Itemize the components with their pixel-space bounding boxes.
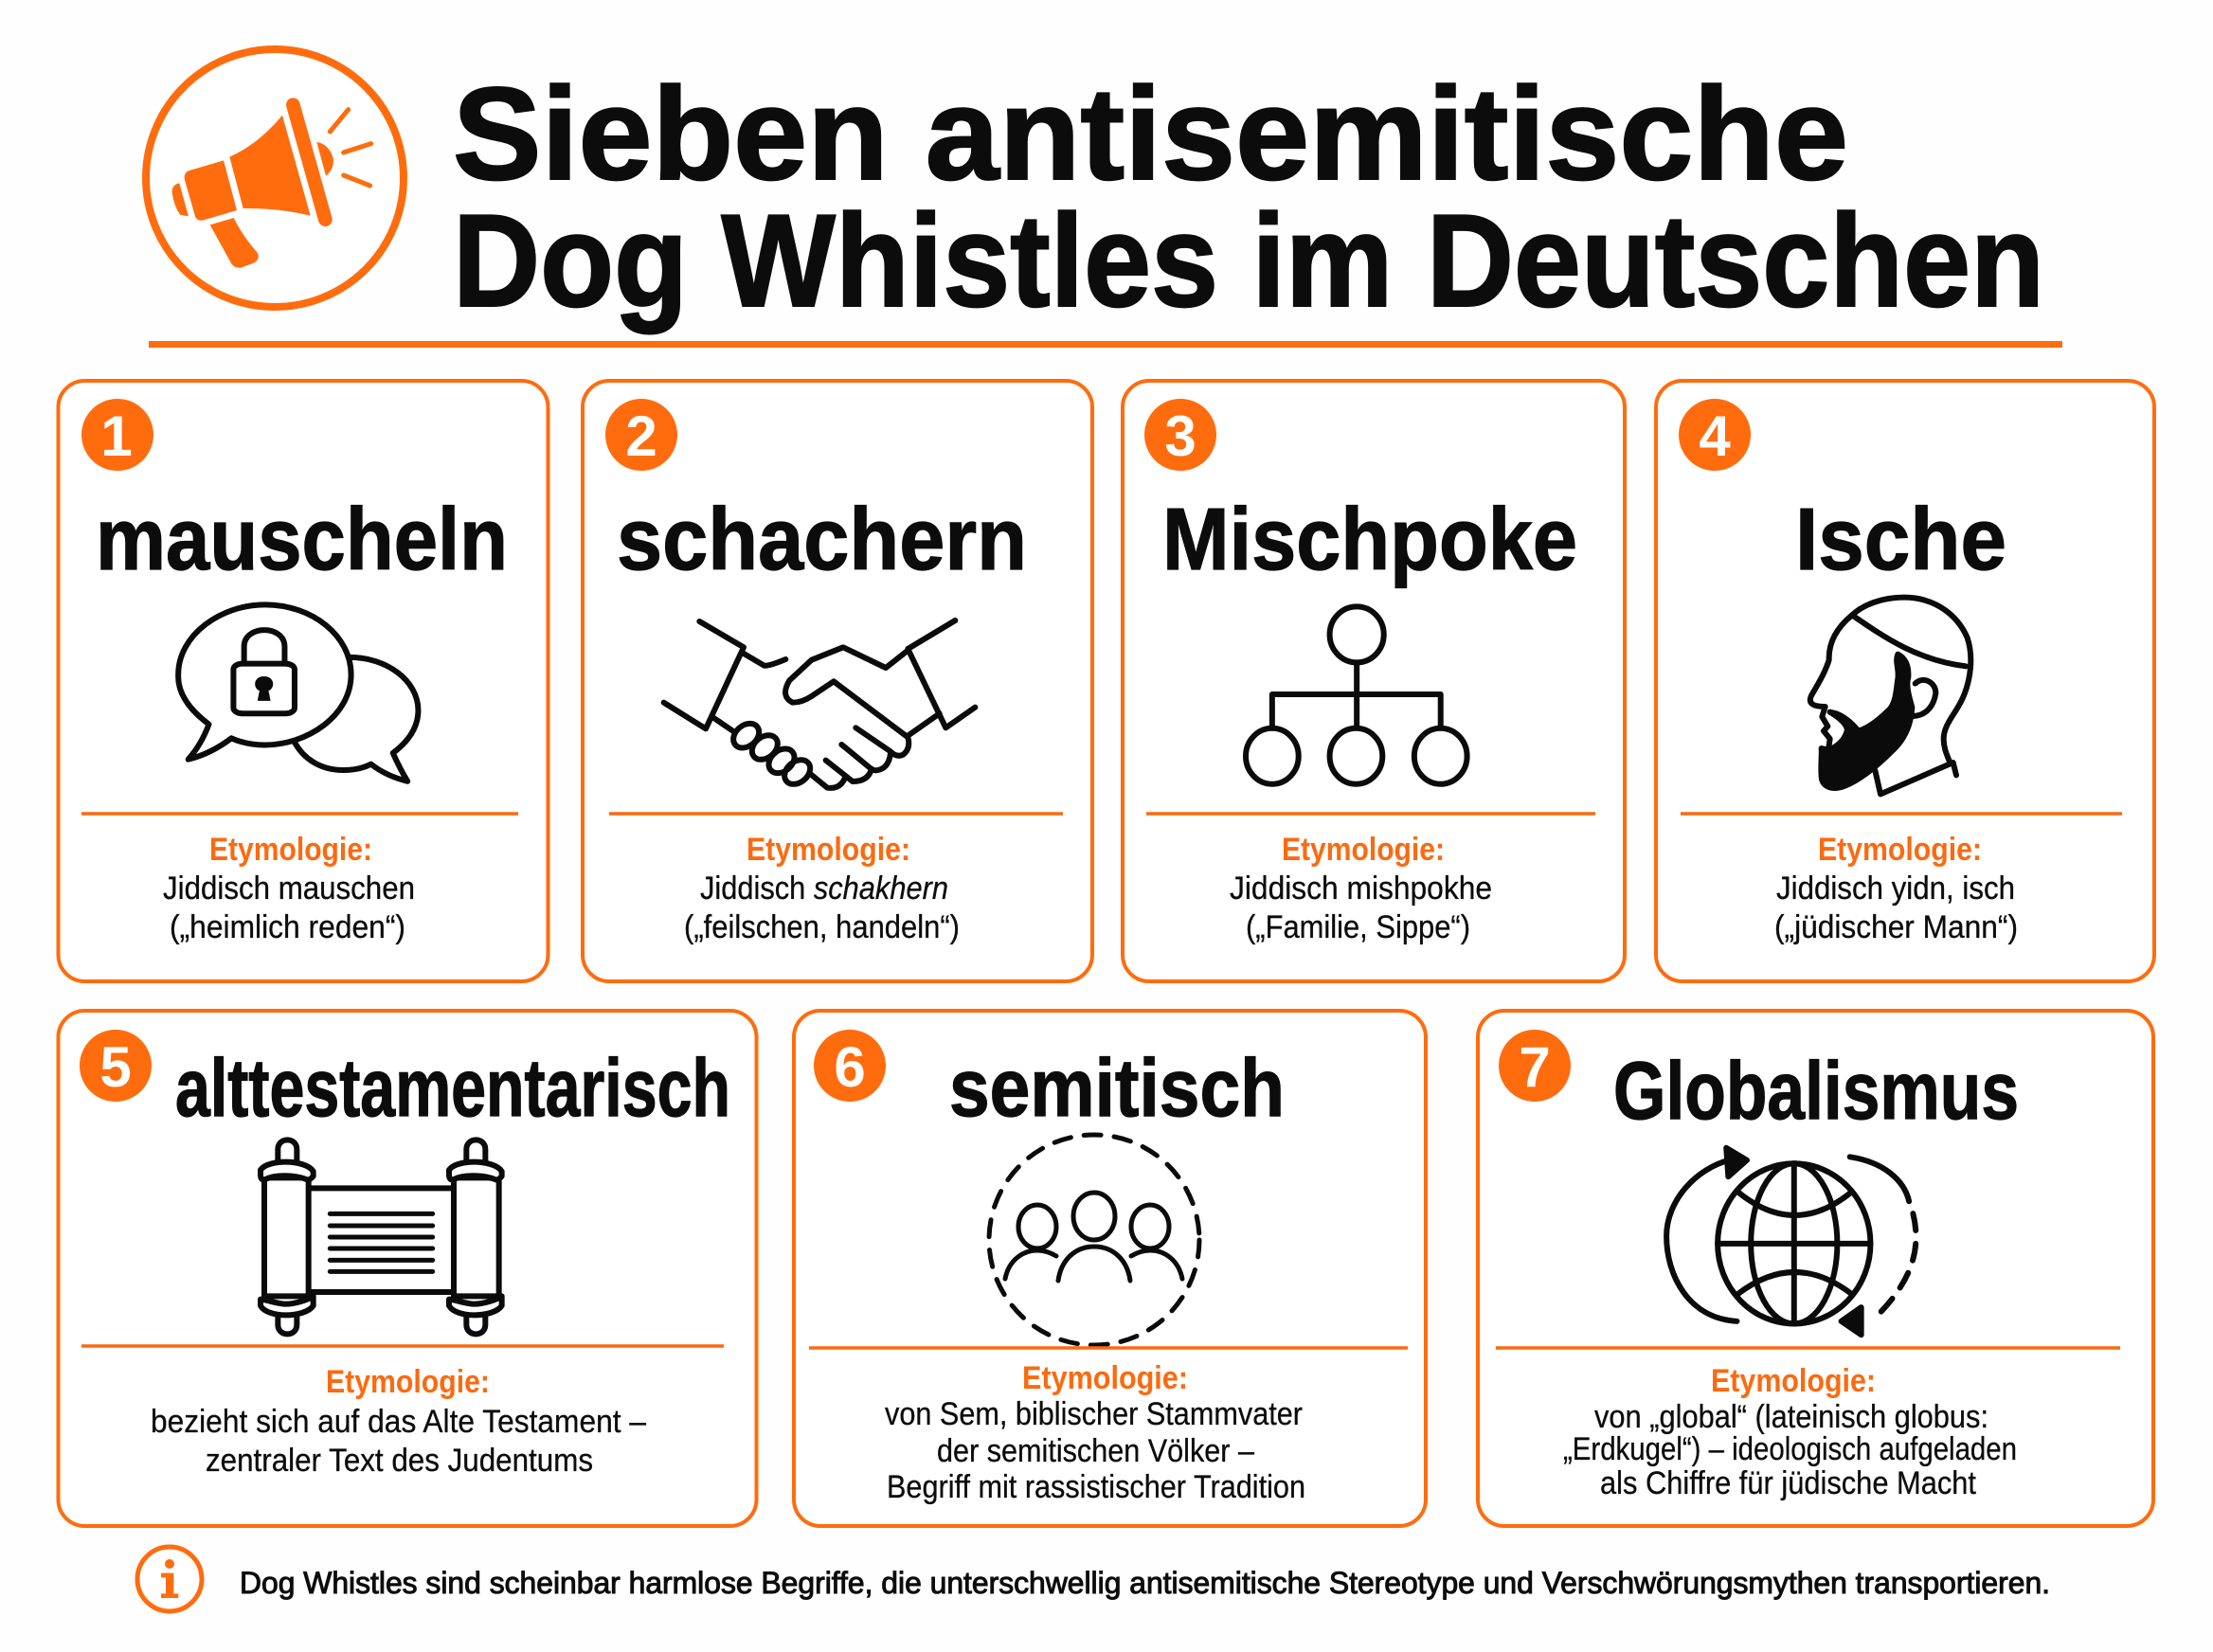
etymology text: Etymologie: [747,832,910,868]
badge 7: 7 [1519,1035,1551,1099]
badge 1: 1 [100,404,133,468]
icon: speech bubbles with lock [178,604,418,781]
icon: family tree [1246,606,1467,784]
badge 2: 2 [625,404,657,468]
term: Mischpoke: Mischpoke [1162,490,1577,588]
panel: Mischpoke [1123,381,1625,981]
term: Globalismus: Globalismus [1613,1046,2019,1137]
badge 6 [814,1030,886,1102]
footer note: Dog Whistles sind scheinbar harmlose Begriffe, die unterschwellig antisemitische Stereotype und Verschwörungsmythen transportieren. [240,1566,2050,1600]
etymology text [1230,832,1492,945]
etymology text: Begriff mit rassistischer Tradition [887,1469,1305,1505]
icon: group in dashed circle [989,1135,1199,1345]
term: alttestamentarisch: alttestamentarisch [175,1043,730,1134]
panel: schachern [583,381,1092,981]
badge 3: 3 [1164,404,1196,468]
term: Ische: Ische [1795,490,2006,588]
badge 1 [81,399,153,471]
etymology text: („Familie, Sippe“) [1246,909,1470,945]
etymology text: von Sem, biblischer Stammvater [885,1396,1303,1432]
title underline [149,341,2062,348]
panel: Globalismus [1478,1011,2153,1526]
panel: Ische [1656,381,2154,981]
etymology text: Jiddisch mauschen [163,871,415,907]
icon: torah scroll [261,1140,502,1334]
etymology text [684,832,960,945]
etymology text: Etymologie: [1022,1360,1188,1396]
etymology text [1774,832,2018,945]
etymology text: („jüdischer Mann“) [1774,909,2018,945]
etymology text: Etymologie: [1711,1363,1876,1399]
badge 7 [1499,1030,1571,1102]
badge 6: 6 [834,1035,866,1099]
title [453,61,2044,334]
badge 4 [1679,399,1751,471]
etymology text: der semitischen Völker – [937,1433,1254,1469]
etymology text: Jiddisch schakhern [700,871,948,907]
term: mauscheln: mauscheln [96,490,508,588]
etymology text: bezieht sich auf das Alte Testament – [151,1404,646,1440]
etymology text: zentraler Text des Judentums [206,1443,593,1479]
etymology text: Etymologie: [1282,832,1445,868]
badge 5: 5 [99,1035,132,1099]
term: schachern: schachern [617,490,1027,588]
icon: handshake [664,620,975,789]
etymology text [885,1360,1305,1505]
etymology text [1563,1363,2017,1501]
badge 4: 4 [1699,404,1731,468]
etymology text: Etymologie: [326,1364,490,1400]
panel: mauscheln [59,381,548,981]
title: Dog Whistles im Deutschen [453,188,2044,334]
etymology text: Jiddisch yidn, isch [1776,871,2015,907]
etymology text: Etymologie: [209,832,372,868]
etymology text: „Erdkugel“) – ideologisch aufgeladen [1563,1431,2017,1467]
badge 3 [1144,399,1216,471]
badge 2 [605,399,677,471]
etymology text: als Chiffre für jüdische Macht [1600,1465,1976,1501]
title: Sieben antisemitische [453,61,1848,207]
icon: megaphone in circle [146,49,404,307]
etymology text: Jiddisch mishpokhe [1230,871,1492,907]
icon: globe with arrows [1666,1148,1916,1335]
icon: info [137,1547,202,1611]
etymology text [151,1364,646,1479]
panel: semitisch [794,1011,1426,1526]
etymology text: („feilschen, handeln“) [684,909,960,945]
etymology text [163,832,415,945]
badge 5 [80,1030,152,1102]
icon: bearded head with kippah [1810,598,1970,794]
panel: alttestamentarisch [59,1011,756,1526]
etymology text: Etymologie: [1818,832,1982,868]
etymology text: von „global“ (lateinisch globus: [1594,1399,1988,1435]
term: semitisch: semitisch [949,1043,1285,1134]
etymology text: („heimlich reden“) [170,909,405,945]
